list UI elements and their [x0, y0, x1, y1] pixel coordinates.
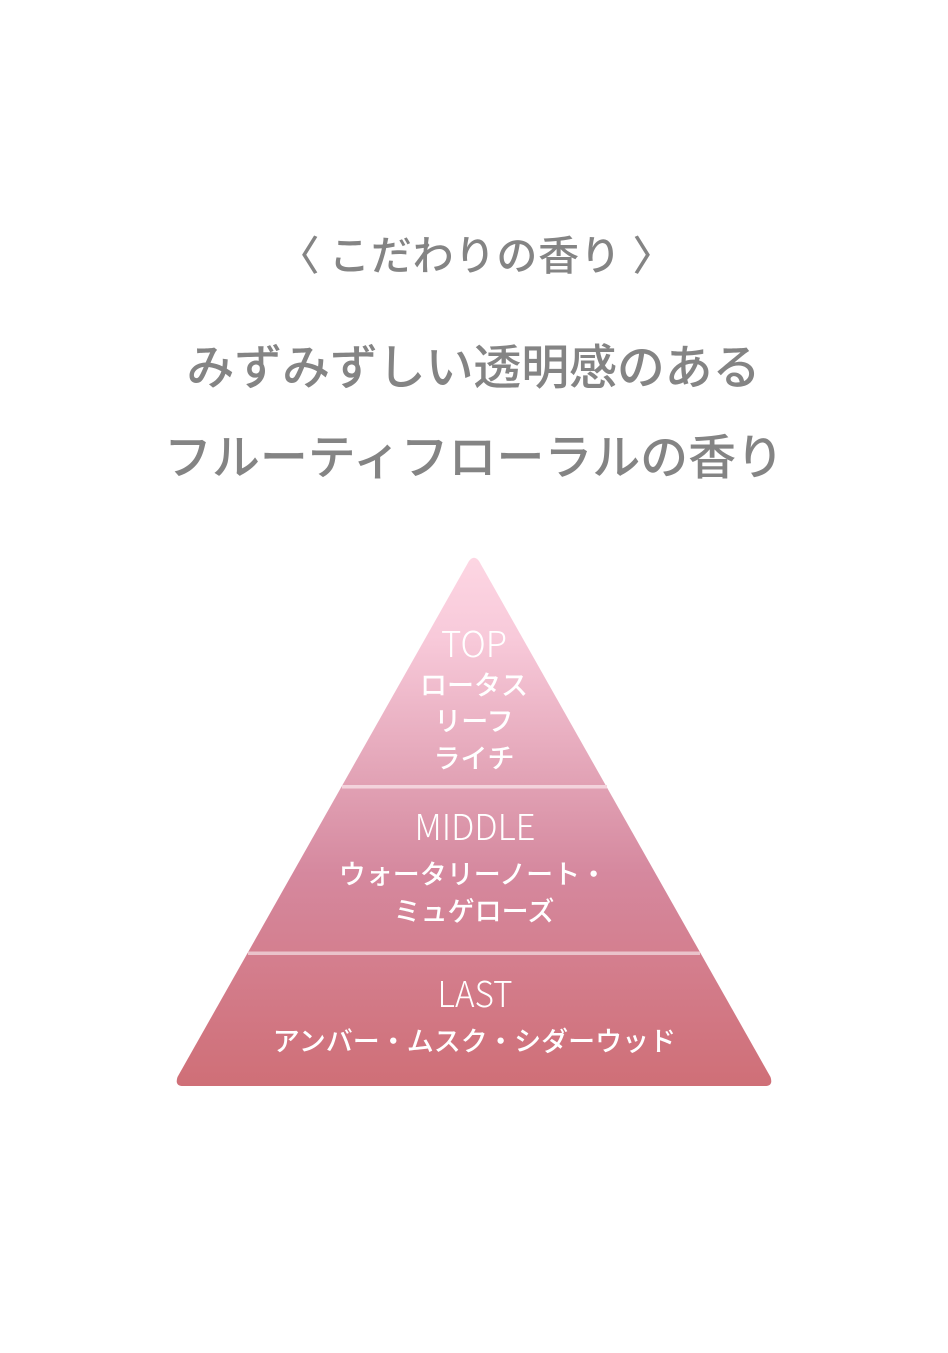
heading: フルーティフローラルの香り	[164, 418, 784, 488]
heading: みずみずしい透明感のある	[186, 328, 760, 398]
heading	[164, 328, 784, 488]
subtitle: 〈	[278, 222, 320, 282]
tier: top: ライチ	[434, 737, 514, 776]
tier: last: アンバー・ムスク・シダーウッド	[273, 1020, 676, 1059]
pyramid shape	[177, 558, 771, 1086]
tier: middle: MIDDLE	[414, 799, 536, 851]
tier: middle	[339, 799, 607, 929]
tier: middle: ウォータリーノート・	[339, 853, 607, 892]
tier: last: LAST	[438, 966, 512, 1018]
tier: top	[420, 616, 528, 776]
tier: last	[273, 966, 676, 1059]
tier: top: リーフ	[434, 700, 514, 739]
tier: top: TOP	[441, 616, 507, 668]
tier: middle: ミュゲローズ	[394, 890, 554, 929]
tier dividers	[248, 785, 700, 955]
pyramid chart	[177, 558, 771, 1086]
subtitle: 〉	[632, 222, 674, 282]
subtitle: こだわりの香り	[329, 222, 621, 282]
tier: top: ロータス	[420, 664, 528, 703]
